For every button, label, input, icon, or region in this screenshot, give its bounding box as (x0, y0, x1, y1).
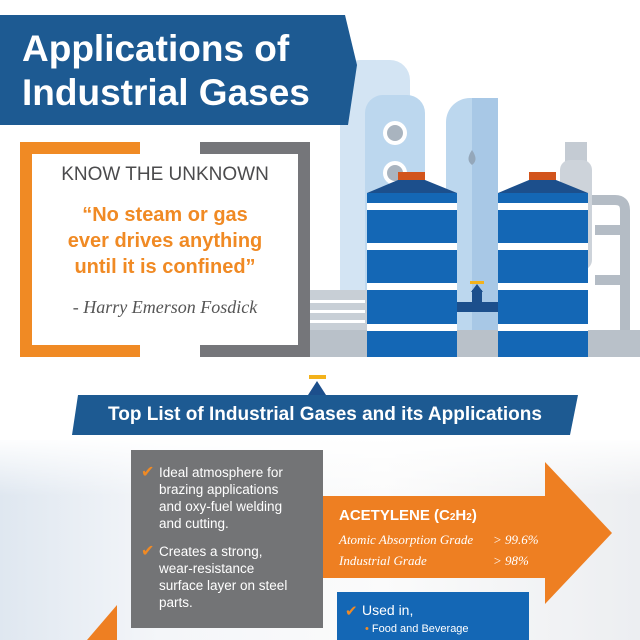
gray pipes right (585, 200, 625, 357)
quote text: ever drives anything (68, 230, 262, 252)
blue box: used in: ✔ (345, 603, 358, 620)
gray box: benefits: parts. (159, 595, 193, 610)
gray box: benefits: and oxy-fuel welding (159, 499, 282, 514)
orange arrow: acetylene: > 99.6% (493, 532, 539, 547)
quote text: “No steam or gas (82, 204, 248, 226)
orange arrow: acetylene: > 98% (493, 553, 529, 568)
gray box: benefits (131, 450, 323, 628)
orange arrow: acetylene: Atomic Absorption Grade (339, 532, 473, 547)
title banner: Industrial Gases (22, 72, 310, 113)
quote author: - Harry Emerson Fosdick (73, 297, 257, 317)
title banner: Applications of (22, 28, 289, 69)
gray box: benefits: and cutting. (159, 516, 229, 531)
quote heading: KNOW THE UNKNOWN (61, 164, 269, 185)
gray box: benefits: ✔ (141, 543, 154, 560)
gray box: benefits: brazing applications (159, 482, 278, 497)
orange arrow: acetylene: Industrial Grade (339, 553, 427, 568)
blue box: used in: • Food and Beverage (365, 623, 469, 635)
background gradient lower (0, 440, 640, 640)
orange arrow partial bottom left (87, 605, 117, 640)
illustration: factory with tanks (310, 60, 640, 357)
tank left (367, 172, 457, 357)
quote box (20, 142, 310, 357)
title banner (0, 15, 357, 125)
gray box: benefits: Creates a strong, (159, 544, 263, 559)
tank right (498, 172, 588, 357)
orange arrow: acetylene: ACETYLENE (C2H2) (339, 507, 477, 524)
base (310, 330, 640, 357)
section banner: Top List of Industrial Gases and its Applications (108, 404, 542, 425)
valve (457, 281, 498, 312)
quote text (68, 204, 262, 278)
blue box: used in: Used in, (362, 602, 413, 618)
orange arrow: acetylene (323, 462, 612, 604)
gray box: benefits: wear-resistance (159, 561, 254, 576)
gray box: benefits: ✔ (141, 464, 154, 481)
middle tower (446, 98, 498, 338)
section banner (72, 375, 578, 435)
gray box: benefits: surface layer on steel (159, 578, 287, 593)
tower back (340, 60, 425, 357)
gray box: benefits: Ideal atmosphere for (159, 465, 283, 480)
quote text: until it is confined” (74, 256, 256, 278)
blue box: used in (337, 592, 529, 640)
